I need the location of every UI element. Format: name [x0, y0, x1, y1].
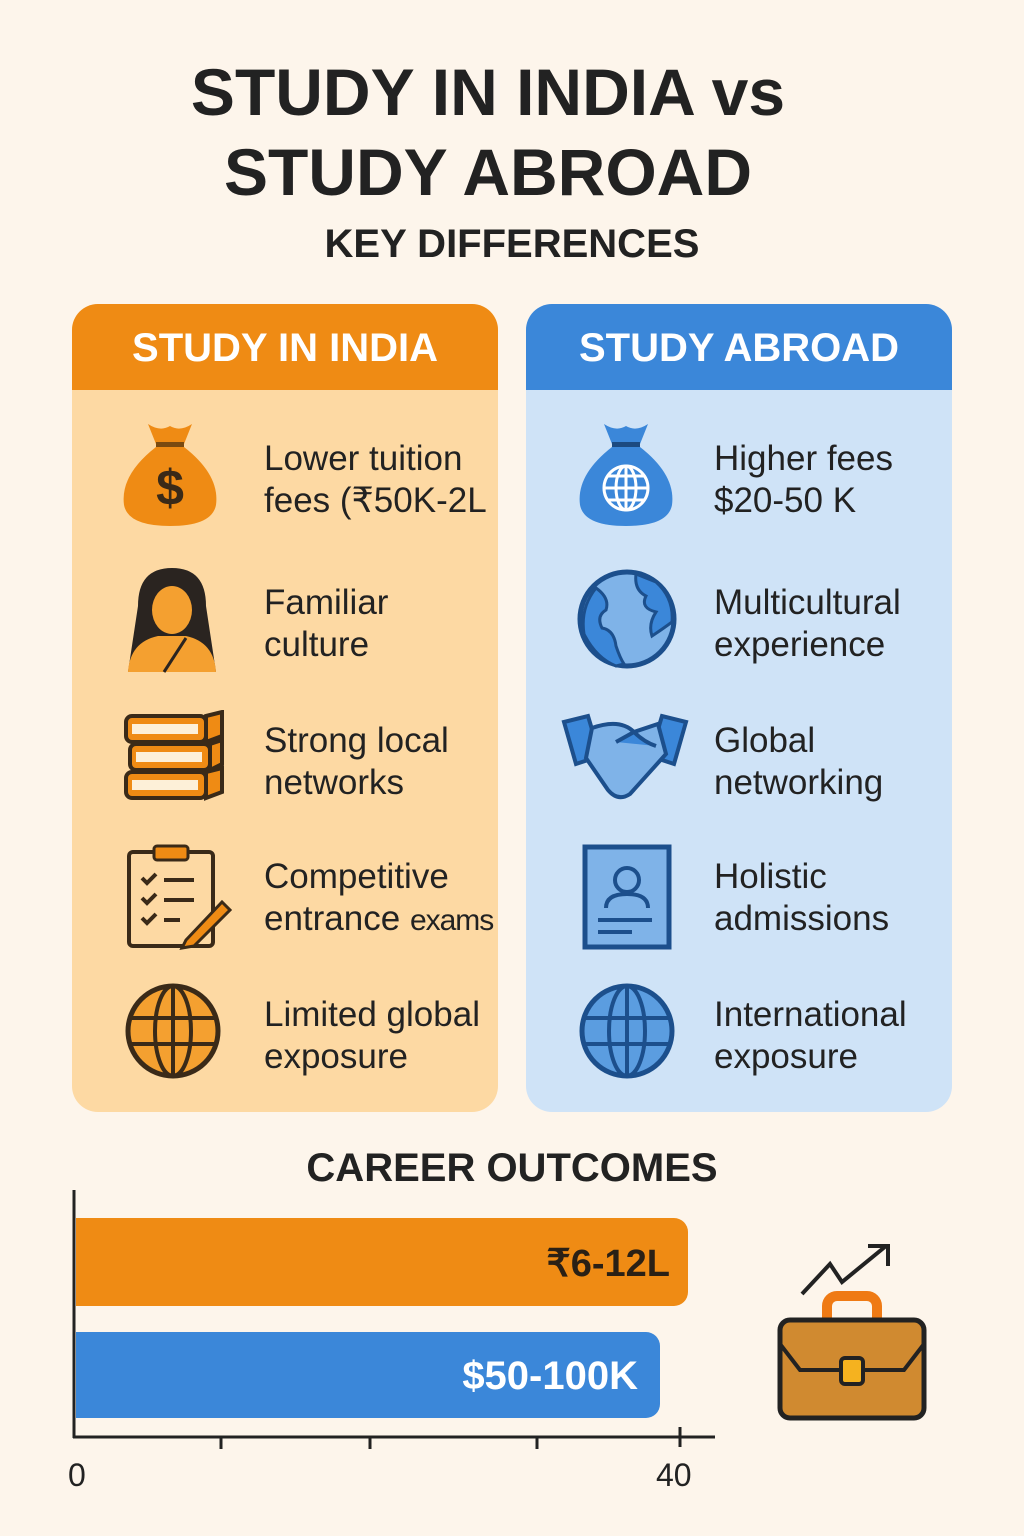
text: limited global exposure: Limited global	[264, 995, 480, 1034]
text: competitive exams: entrance exams	[264, 899, 493, 938]
title: STUDY IN INDIA vs	[191, 55, 785, 129]
axis labels	[68, 1457, 692, 1493]
icon: handshake	[562, 714, 688, 800]
text: higher fees	[714, 439, 893, 520]
header: study in india	[72, 304, 498, 390]
text: global networking	[714, 721, 883, 802]
text: familiar culture: culture	[264, 625, 369, 664]
text: international exposure: exposure	[714, 1037, 858, 1076]
subtitle: KEY DIFFERENCES	[325, 222, 699, 266]
text: higher fees: $20-50 K	[714, 481, 856, 520]
text: international exposure	[714, 995, 907, 1076]
text: holistic admissions: Holistic	[714, 857, 827, 896]
text: competitive exams: Competitive	[264, 857, 449, 896]
header: study in india: STUDY IN INDIA	[132, 326, 438, 370]
text: lower tuition: Lower tuition	[264, 439, 462, 478]
text: competitive exams	[264, 857, 494, 938]
panel: study in india	[72, 304, 498, 1112]
text: familiar culture: Familiar	[264, 583, 388, 622]
title: STUDY ABROAD	[224, 135, 752, 209]
text: lower tuition: fees (₹50K-2L	[264, 481, 487, 520]
text: international exposure: International	[714, 995, 907, 1034]
icon: globe orange	[126, 984, 220, 1078]
icon: earth	[578, 570, 676, 668]
icon: clipboard	[127, 844, 232, 950]
header: study abroad: STUDY ABROAD	[579, 326, 899, 370]
icon: briefcase with arrow	[778, 1244, 926, 1420]
text: holistic admissions	[714, 857, 889, 938]
panel: study abroad	[526, 304, 952, 1112]
bar: india: ₹6-12L	[547, 1243, 670, 1285]
icon: id card	[582, 844, 672, 950]
bar: abroad: $50-100K	[462, 1354, 638, 1398]
text: strong local networks: Strong local	[264, 721, 449, 760]
bar chart	[68, 1190, 715, 1493]
text: global networking: networking	[714, 763, 883, 802]
text: higher fees: Higher fees	[714, 439, 893, 478]
axis labels: 40	[656, 1457, 692, 1493]
icon: money bag globe	[580, 424, 672, 526]
text: limited global exposure	[264, 995, 480, 1076]
icon: money bag	[124, 424, 216, 526]
text: multicultural	[714, 583, 901, 664]
bar: india	[76, 1218, 688, 1306]
text: global networking: Global	[714, 721, 815, 760]
text: limited global exposure: exposure	[264, 1037, 408, 1076]
icon: money bag: $	[156, 460, 184, 516]
header: study abroad	[526, 304, 952, 390]
text: strong local networks	[264, 721, 449, 802]
icon: books	[124, 710, 224, 801]
text: multicultural: experience	[714, 625, 885, 664]
text: lower tuition	[264, 439, 487, 520]
heading: career outcomes: CAREER OUTCOMES	[306, 1146, 718, 1190]
text: holistic admissions: admissions	[714, 899, 889, 938]
icon: woman	[128, 568, 216, 673]
bar: abroad	[76, 1332, 660, 1418]
text: strong local networks: networks	[264, 763, 404, 802]
text: familiar culture	[264, 583, 388, 664]
title	[191, 55, 785, 209]
axis labels: 0	[68, 1457, 86, 1493]
icon: globe blue	[580, 984, 674, 1078]
text: multicultural: Multicultural	[714, 583, 901, 622]
